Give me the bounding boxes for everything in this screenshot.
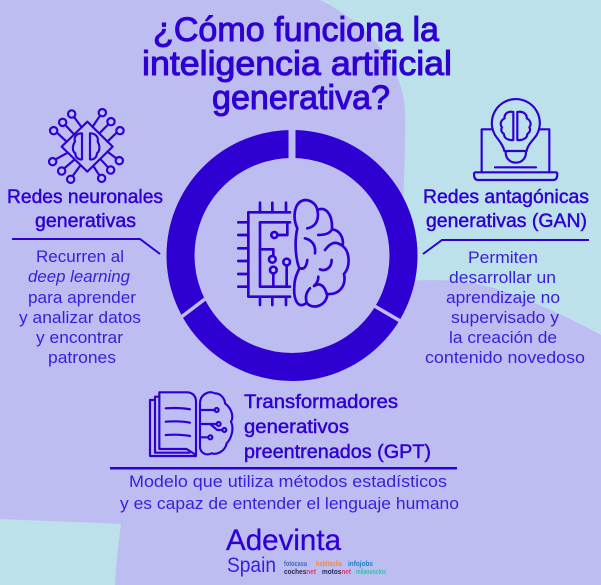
title: ¿Cómo funciona la (153, 11, 439, 49)
heading: generativos (244, 417, 349, 438)
panel: transformadores generativos preentrenados (110, 392, 459, 513)
body text: Recurren al (36, 247, 124, 266)
title: inteligencia artificial (142, 45, 452, 83)
body text: la creación de (449, 328, 557, 347)
brand names (284, 561, 386, 576)
icon: laptop with light bulb brain (474, 99, 557, 180)
heading (7, 187, 163, 232)
icon: neural chip (49, 109, 124, 183)
logo: Adevinta Spain: Spain (227, 554, 276, 577)
body text: contenido novedoso (425, 348, 585, 367)
divider line (110, 467, 457, 470)
body text: supervisado y (451, 308, 560, 327)
panel: redes antagónicas generativas (423, 99, 589, 367)
connector line (12, 239, 160, 254)
body text: y encontrar (36, 328, 123, 347)
body text: desarrollar un (449, 268, 556, 287)
brain (294, 200, 349, 306)
heading: preentrenados (GPT) (244, 442, 431, 463)
heading (423, 187, 589, 232)
body text (425, 248, 585, 367)
heading (244, 392, 431, 463)
brand names: motosnet (322, 569, 352, 576)
body text: para aprender (28, 288, 136, 307)
heading: generativas (35, 211, 136, 232)
body text: y es capaz de entender el lenguaje humano (120, 494, 459, 513)
icon: chip and brain (238, 200, 349, 306)
body text: patrones (48, 348, 116, 367)
logo: Adevinta Spain: Adevinta (226, 524, 341, 557)
heading: Redes antagónicas (423, 187, 589, 208)
donut ring (180, 128, 404, 367)
heading: Redes neuronales (7, 187, 163, 208)
brand names: habitaclia (316, 561, 342, 568)
chip (238, 203, 290, 305)
body text: aprendizaje no (446, 288, 560, 307)
heading: generativas (GAN) (426, 211, 587, 232)
body text (120, 472, 459, 513)
body text (19, 247, 141, 367)
body text: Modelo que utiliza métodos estadísticos (129, 472, 447, 491)
brand names: fotocasa (284, 561, 307, 568)
brand names: cochesnet (284, 569, 317, 576)
body text: y analizar datos (19, 308, 141, 327)
brand names: milanuncios (356, 569, 386, 576)
logo: Adevinta Spain (226, 524, 386, 577)
title: generativa? (212, 79, 390, 117)
panel: redes neuronales generativas (7, 109, 163, 367)
body text: deep learning (28, 267, 131, 286)
body text: Permiten (468, 248, 538, 267)
icon: book and brain (150, 392, 232, 456)
connector line (423, 240, 589, 254)
heading: Transformadores (244, 392, 398, 413)
title (142, 11, 452, 117)
brand names: infojobs (348, 561, 373, 568)
